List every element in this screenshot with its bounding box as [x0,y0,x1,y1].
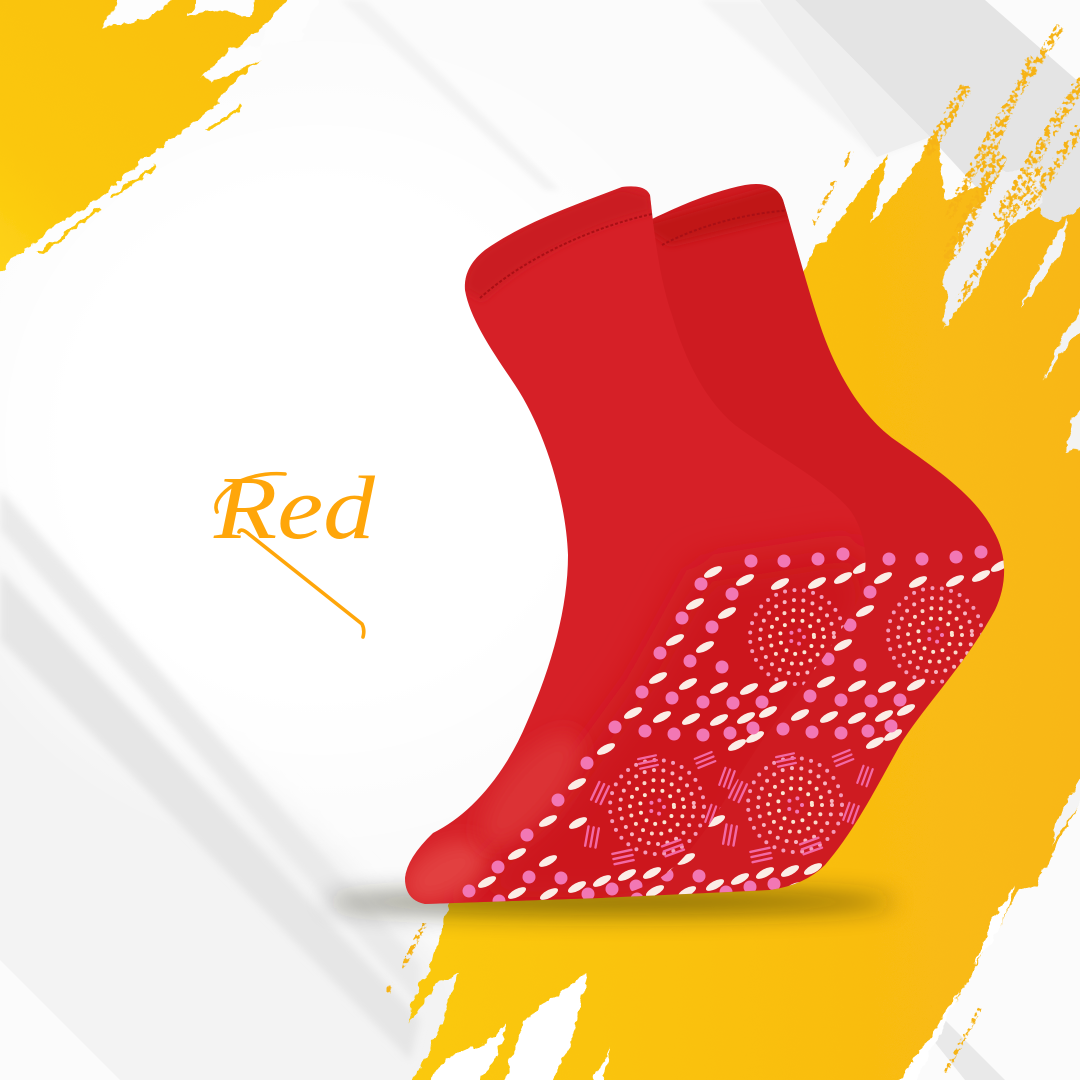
white brush streaks [940,170,1042,327]
label: Red: Red [213,458,375,557]
back sock [601,184,1004,898]
brush: main yellow band [388,30,1080,1080]
label: Red [213,458,375,637]
ground shadow [325,889,895,915]
brush: top-left yellow [0,0,320,300]
yellow flecks [388,30,1080,1072]
flourish: swash and tail of the R [216,474,364,637]
front sock [393,180,880,917]
socks [393,170,1020,917]
